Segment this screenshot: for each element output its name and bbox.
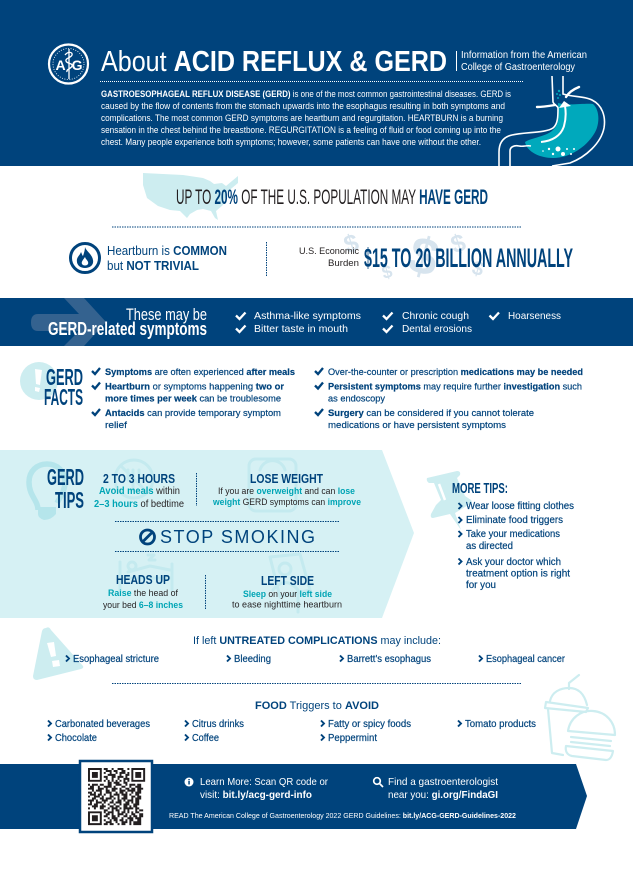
text: find a gastroenterologist bbox=[388, 776, 498, 801]
heading: GERD facts bbox=[44, 364, 83, 410]
heading: more tips: MORE TIPS: bbox=[452, 480, 508, 497]
panel: heartburn callout: but NOT TRIVIAL bbox=[107, 259, 199, 273]
tip: heads up bbox=[103, 572, 183, 611]
tip: left side bbox=[232, 573, 342, 610]
icon: dollar signs: $ bbox=[402, 225, 445, 289]
icon: US map bbox=[143, 173, 238, 220]
list: symptoms: Dental erosions bbox=[402, 323, 472, 335]
subtitle bbox=[456, 50, 587, 73]
subtitle: College of Gastroenterology bbox=[461, 62, 575, 73]
tip: heads up: Raise the head of bbox=[108, 588, 178, 599]
panel: economic burden: Burden bbox=[328, 258, 359, 269]
icon: exclamation circle bbox=[20, 362, 58, 400]
panel: population statistic bbox=[143, 173, 488, 220]
heading: population: UP TO 20% OF THE U.S. POPULATION MAY HAVE GERD bbox=[176, 186, 488, 209]
panel: header bbox=[0, 0, 633, 166]
list: food triggers: Peppermint bbox=[328, 733, 377, 744]
list: more tips: Eliminate food triggers bbox=[466, 515, 563, 526]
intro text: sensation in the chest behind the breastbone. REGURGITATION is a feeling of fluid or food coming up into the bbox=[101, 125, 501, 135]
list: complications bbox=[66, 654, 566, 665]
tip: heads up: your bed 6–8 inches bbox=[103, 600, 183, 611]
heading: symptoms bbox=[48, 305, 207, 339]
heading: GERD tips bbox=[47, 464, 84, 513]
intro text: GASTROESOPHAGEAL REFLUX DISEASE (GERD) is one of the most common gastrointestinal diseases. GERD is bbox=[101, 89, 511, 99]
heading: GERD facts: GERD bbox=[46, 364, 83, 390]
list: facts right bbox=[315, 367, 583, 431]
list: symptoms: Asthma-like symptoms bbox=[254, 310, 361, 322]
tip: lose weight: weight GERD symptoms can improve bbox=[212, 497, 361, 508]
icon: ghost scale bbox=[249, 459, 296, 511]
intro text bbox=[101, 89, 511, 147]
panel: economic burden bbox=[299, 225, 573, 289]
icon: ghost plate and fork bbox=[115, 460, 153, 498]
icon: ghost bed bbox=[120, 555, 172, 590]
list: food triggers: Citrus drinks bbox=[192, 719, 244, 730]
tip: lose weight: LOSE WEIGHT bbox=[250, 471, 323, 486]
intro text: complications. The most common GERD symptoms are heartburn and regurgitation. HEARTBURN is a burning bbox=[101, 113, 503, 123]
tip: heads up: HEADS UP bbox=[116, 572, 170, 587]
list: facts left: Symptoms are often experienced after meals bbox=[105, 367, 295, 378]
icon: arrow bbox=[31, 298, 106, 346]
list: symptoms bbox=[236, 310, 561, 335]
panel: GERD tips bbox=[0, 450, 414, 618]
list: facts right: as endoscopy bbox=[328, 394, 385, 404]
tip: lose weight bbox=[212, 471, 361, 508]
icon: dollar signs bbox=[340, 225, 486, 289]
heading: GERD tips: GERD bbox=[47, 464, 84, 490]
heading: symptoms: These may be bbox=[126, 305, 207, 324]
tip: left side: to ease nighttime heartburn bbox=[232, 600, 342, 610]
text: burden label: U.S. Economic bbox=[299, 246, 359, 257]
list: facts left: Heartburn or symptoms happening two or bbox=[105, 382, 284, 392]
icon: ACG logo bbox=[49, 44, 88, 84]
list: facts left: Antacids can provide temporary symptom bbox=[105, 408, 281, 419]
icon: dollar signs: $ bbox=[447, 228, 469, 259]
list: more tips: for you bbox=[466, 580, 496, 591]
panel: footer bbox=[0, 761, 587, 832]
text: heartburn: Heartburn is COMMON bbox=[107, 244, 227, 258]
list: food triggers: Fatty or spicy foods bbox=[328, 719, 411, 730]
list: facts left bbox=[92, 367, 295, 431]
list: complications: Esophageal stricture bbox=[73, 654, 159, 665]
list: more tips: Take your medications bbox=[466, 529, 560, 540]
tip: meal timing: 2–3 hours of bedtime bbox=[94, 499, 184, 510]
list: food triggers bbox=[48, 719, 536, 744]
panel: food triggers bbox=[48, 675, 615, 760]
list: facts right: medications or have persistent symptoms bbox=[328, 420, 506, 431]
icon: info bbox=[184, 778, 194, 786]
list: facts right: Over-the-counter or prescription medications may be needed bbox=[328, 367, 583, 378]
list: complications: Barrett's esophagus bbox=[347, 654, 431, 665]
icon: stomach with reflux bbox=[499, 76, 604, 166]
list: more tips: treatment option is right bbox=[466, 568, 570, 580]
tip: left side: Sleep on your left side bbox=[243, 589, 332, 600]
icon: ACG logo: A G bbox=[56, 57, 83, 73]
title: About ACID REFLUX & GERD bbox=[101, 46, 447, 78]
list: facts right: Surgery can be considered if you cannot tolerate bbox=[328, 408, 534, 419]
heading: GERD tips: TIPS bbox=[55, 487, 84, 513]
arrow background bbox=[0, 450, 414, 618]
text: learn more: Learn More: Scan QR code or bbox=[200, 776, 328, 788]
text: learn more bbox=[200, 776, 328, 801]
QR code bbox=[80, 761, 152, 832]
heading: complications: If left UNTREATED COMPLICATIONS may include: bbox=[193, 635, 441, 647]
list: food triggers: Tomato products bbox=[465, 719, 536, 730]
icon: warning triangle bbox=[33, 627, 83, 680]
heading: food triggers: FOOD Triggers to AVOID bbox=[255, 700, 379, 712]
intro text: caused by the flow of contents from the stomach upwards into the esophagus resulting in both symptoms and bbox=[101, 101, 505, 111]
icon: dollar signs: $ bbox=[470, 257, 486, 281]
list: symptoms: Hoarseness bbox=[508, 310, 561, 322]
list: complications: Esophageal cancer bbox=[486, 654, 566, 665]
icon: ghost sleeper on pillow bbox=[270, 554, 310, 612]
text: find a gastroenterologist: Find a gastroenterologist bbox=[388, 776, 498, 788]
list: more tips: Ask your doctor which bbox=[466, 557, 561, 568]
icon: light bulb bbox=[29, 464, 65, 520]
heading: GERD facts: FACTS bbox=[44, 384, 83, 410]
text: guidelines: READ The American College of Gastroenterology 2022 GERD Guidelines: bit.ly/ACG-GERD-Guidelines-2022 bbox=[169, 811, 516, 820]
list: more tips: Wear loose fitting clothes bbox=[466, 501, 574, 512]
list: facts right: Persistent symptoms may require further investigation such bbox=[328, 382, 582, 392]
list: more tips: as directed bbox=[466, 541, 513, 552]
panel: complications bbox=[33, 627, 566, 680]
tip: meal timing bbox=[94, 471, 184, 510]
list: food triggers: Coffee bbox=[192, 733, 219, 744]
tip: meal timing: 2 TO 3 HOURS bbox=[103, 471, 175, 486]
heading: symptoms: GERD-related symptoms bbox=[48, 319, 207, 339]
icon: cup and burger bbox=[545, 675, 615, 760]
panel: GERD-related symptoms bbox=[0, 298, 633, 346]
tip: lose weight: If you are overweight and can lose bbox=[218, 486, 355, 497]
tip: left side: LEFT SIDE bbox=[261, 573, 314, 588]
icon: dollar signs: $ bbox=[340, 228, 362, 259]
panel: more tips bbox=[427, 471, 574, 591]
list: complications: Bleeding bbox=[234, 654, 271, 665]
panel: GERD facts bbox=[20, 362, 583, 431]
text: find a gastroenterologist: near you: gi.org/FindaGI bbox=[388, 789, 498, 801]
list: facts left: relief bbox=[105, 420, 127, 431]
list: food triggers: Carbonated beverages bbox=[55, 719, 150, 730]
list: symptoms: Chronic cough bbox=[402, 310, 469, 322]
icon: push pin bbox=[427, 471, 472, 530]
icon: dollar signs: $ bbox=[380, 261, 394, 283]
tip: stop smoking: STOP SMOKING bbox=[160, 527, 315, 547]
list: symptoms: Bitter taste in mouth bbox=[254, 323, 348, 335]
icon: search bbox=[374, 778, 383, 787]
list: facts left: more times per week can be troublesome bbox=[105, 394, 281, 404]
subtitle: Information from the American bbox=[461, 50, 587, 61]
list: food triggers: Chocolate bbox=[55, 733, 97, 744]
panel: heartburn callout bbox=[70, 244, 227, 273]
list: more tips bbox=[458, 501, 574, 591]
tip: meal timing: Avoid meals within bbox=[99, 486, 180, 497]
icon: flame bbox=[70, 244, 100, 272]
text: learn more: visit: bit.ly/acg-gerd-info bbox=[200, 789, 312, 801]
intro text: chest. Many people experience both symptoms; however, some patients can have one without the other. bbox=[101, 137, 481, 147]
